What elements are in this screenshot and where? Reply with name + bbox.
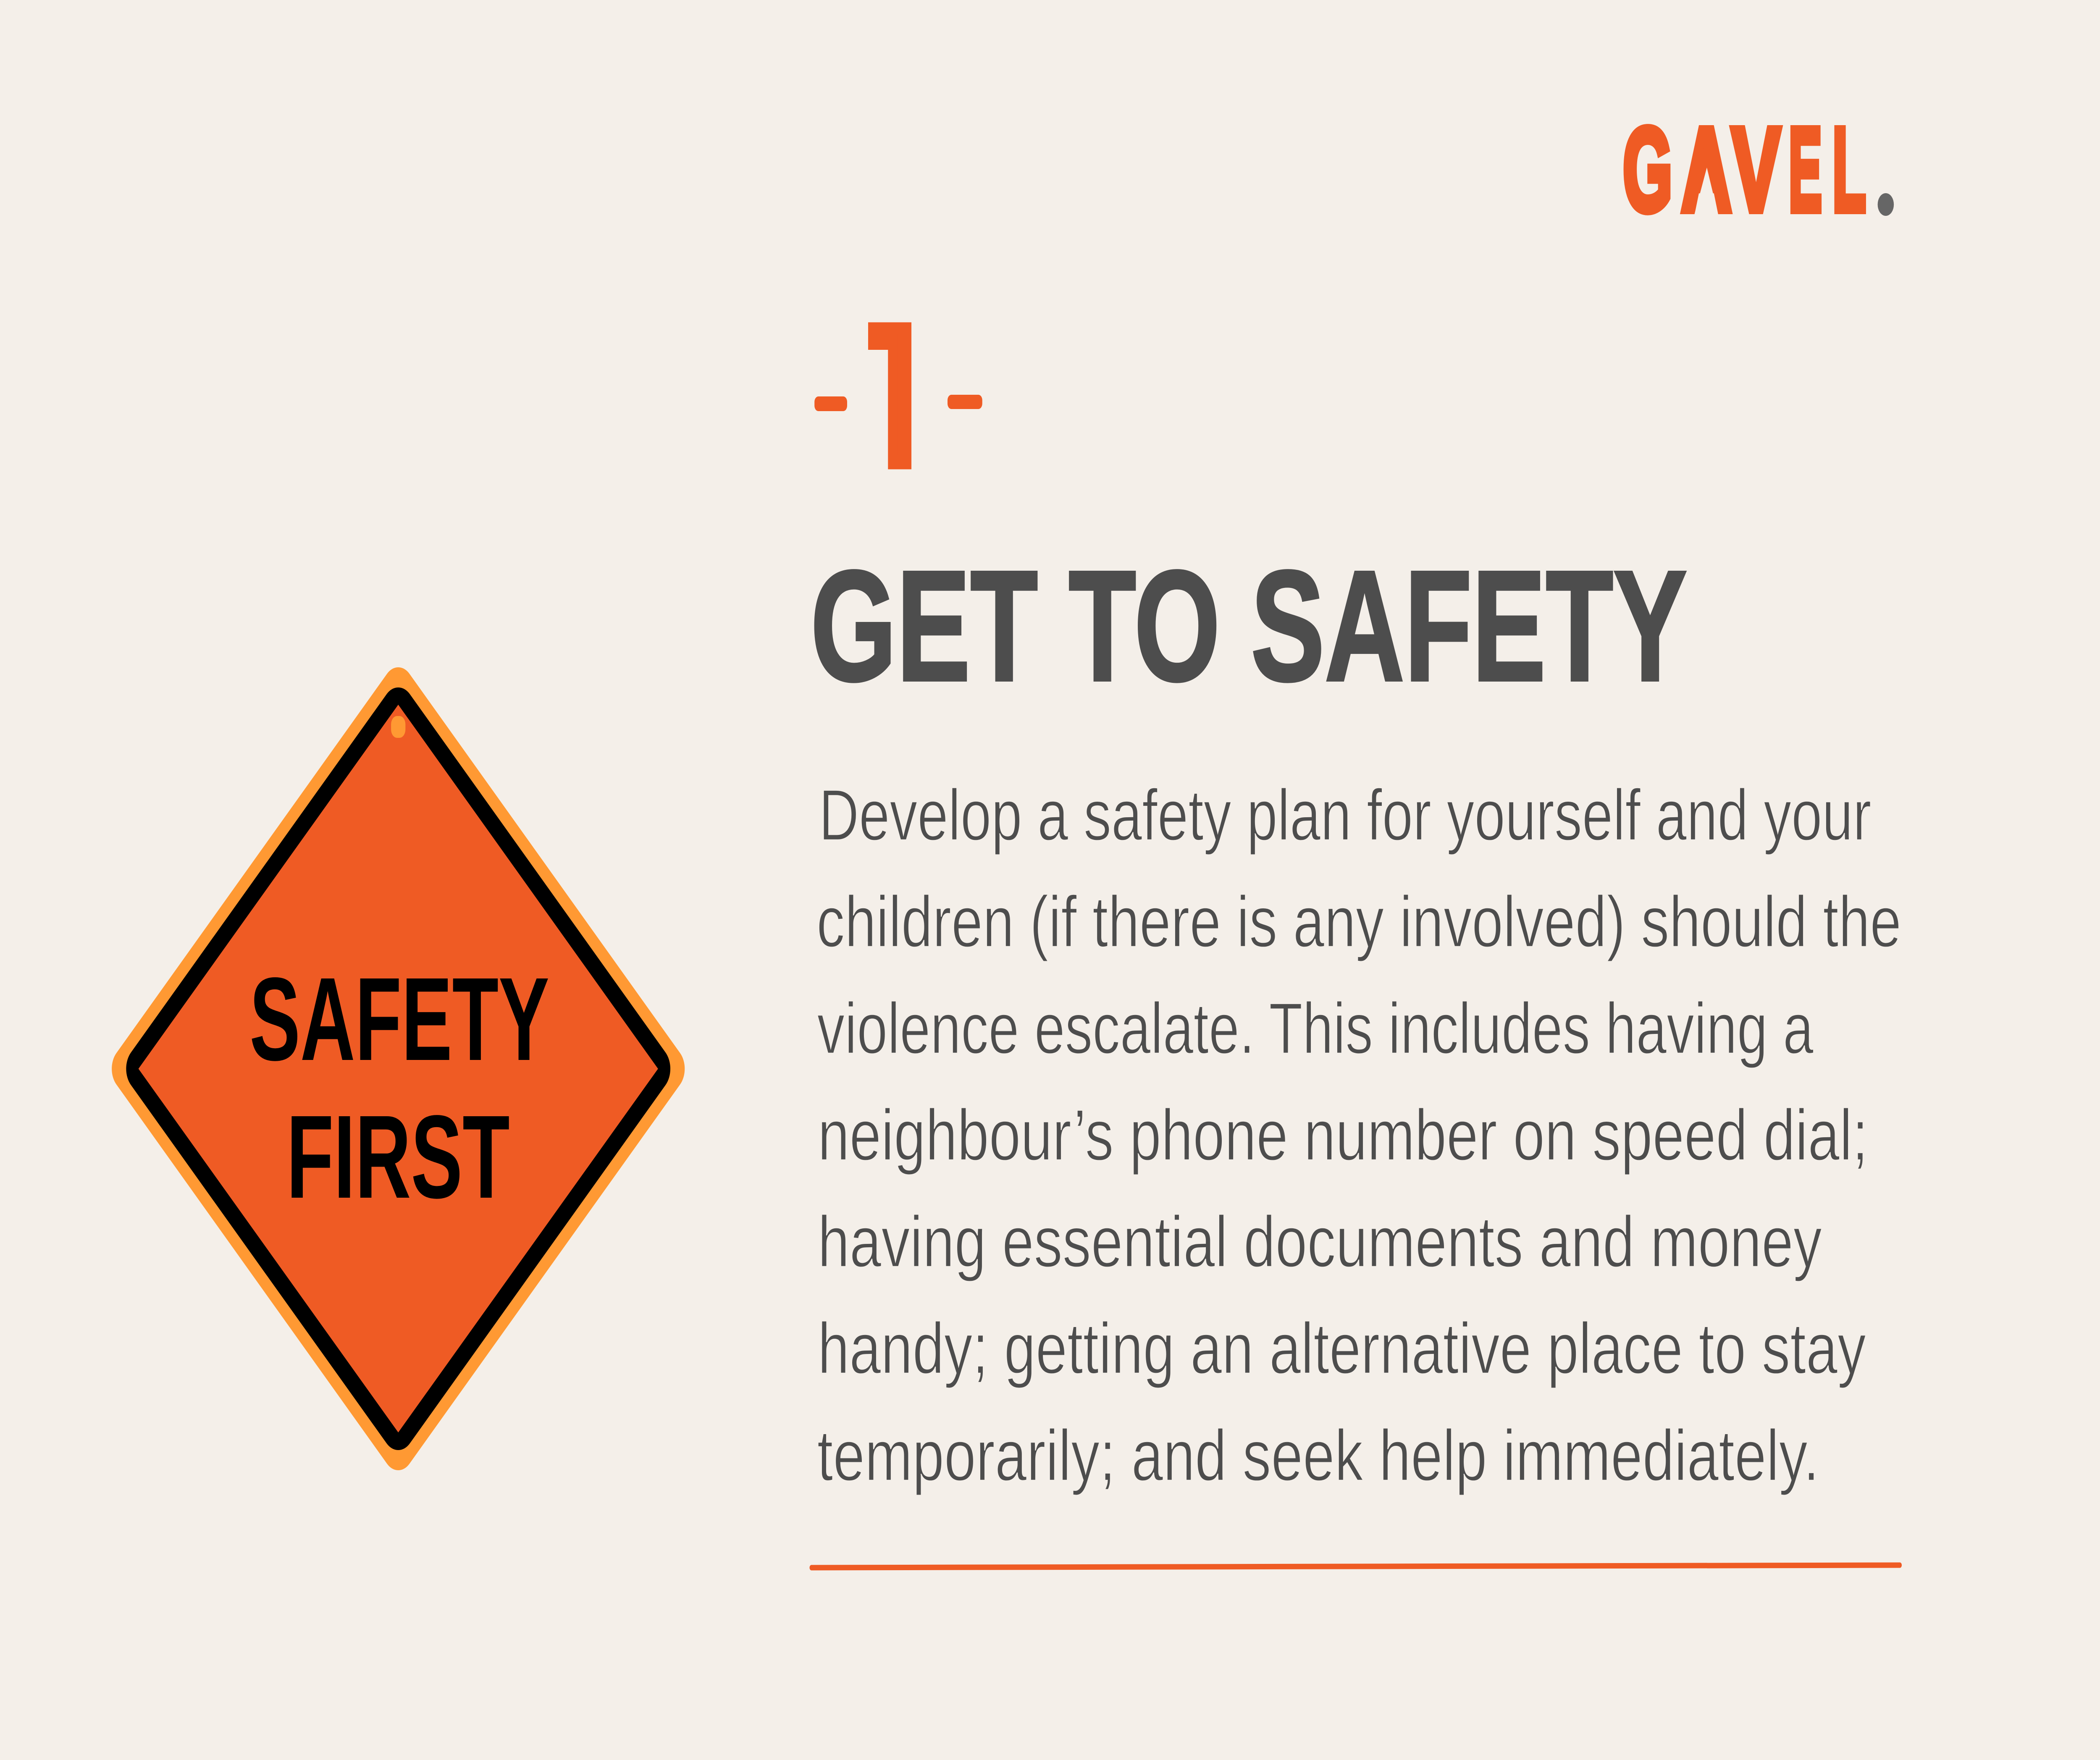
divider rule <box>811 1565 1900 1568</box>
body text: temporarily; and seek help immediately. <box>817 1415 1819 1496</box>
sign mounting hole <box>391 716 405 738</box>
logo: GAVEL <box>1623 103 1894 236</box>
logo: GAVEL: E <box>1789 103 1822 236</box>
logo: GAVEL: G <box>1623 103 1672 236</box>
body text: neighbour’s phone number on speed dial; <box>818 1095 1868 1175</box>
logo: GAVEL: L <box>1832 103 1866 236</box>
body text: violence escalate. This includes having a <box>817 988 1814 1069</box>
body text <box>816 775 1901 1496</box>
sign text: SAFETY <box>249 952 549 1085</box>
logo: GAVEL: A <box>1681 103 1731 236</box>
sign text: FIRST <box>286 1090 510 1223</box>
body text: having essential documents and money <box>818 1201 1822 1282</box>
sign text <box>249 952 549 1223</box>
sign gold border <box>128 690 669 1448</box>
step number: 1 <box>851 272 938 516</box>
sign orange face <box>139 705 658 1432</box>
infographic canvas <box>112 124 1902 1571</box>
heading: GET TO SAFETY <box>811 538 1687 714</box>
sign black border <box>143 711 654 1427</box>
step number <box>814 272 982 516</box>
body text: handy; getting an alternative place to stay <box>818 1308 1866 1389</box>
body text: Develop a safety plan for yourself and your <box>819 775 1872 855</box>
body text: children (if there is any involved) should the <box>816 881 1901 962</box>
logo: GAVEL: V <box>1732 103 1780 236</box>
icon: safety first road sign <box>128 690 669 1448</box>
